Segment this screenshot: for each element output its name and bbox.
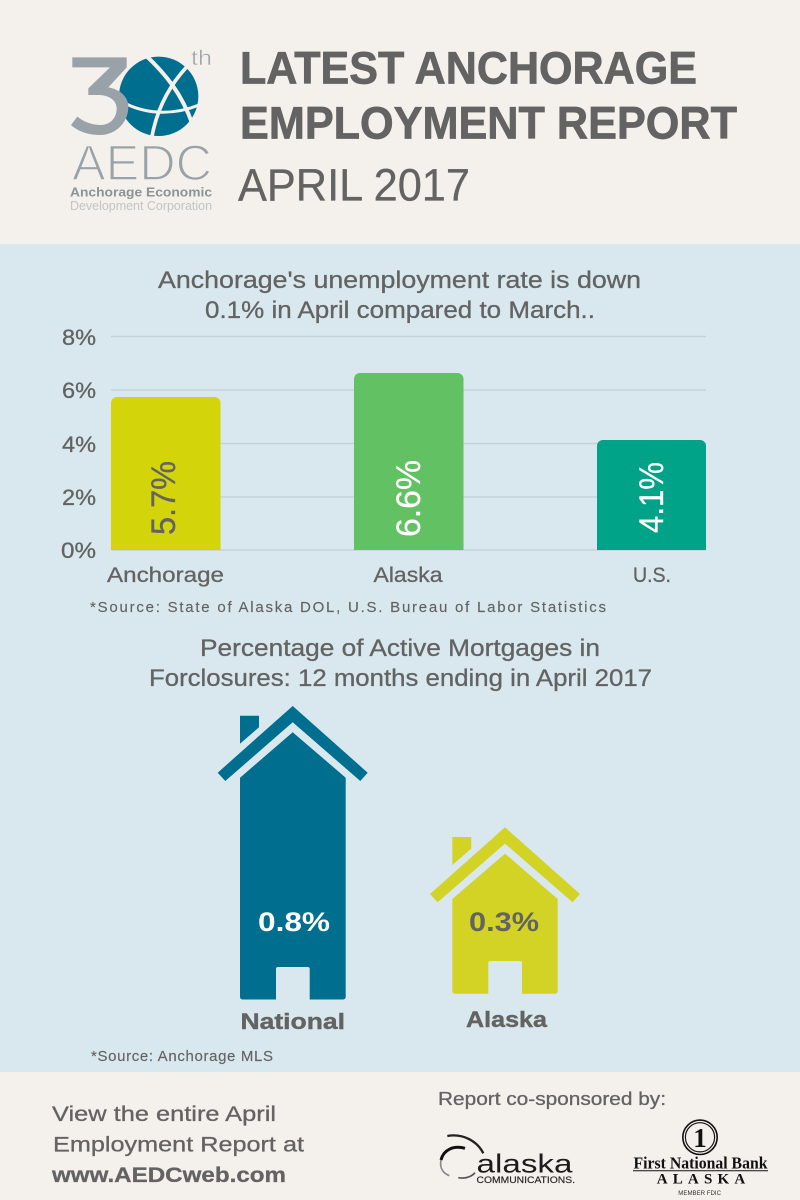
logo: First National Bank Alaska: ALASKA (657, 1172, 745, 1188)
title: LATEST ANCHORAGE (240, 42, 697, 94)
heading: unemployment: 0.1% in April compared to March.. (205, 297, 595, 324)
label: National: National (240, 1009, 345, 1034)
logo: First National Bank Alaska: 1 (693, 1123, 707, 1153)
value: Alaska: 0.3% (469, 907, 539, 937)
heading: mortgages: Forclosures: 12 months ending in April 2017 (149, 665, 652, 692)
bar chart: unemployment rate (61, 325, 706, 587)
heading: unemployment (158, 267, 641, 324)
logo: Alaska Communications: alaska (476, 1148, 573, 1178)
panel: charts background (0, 244, 800, 1072)
footer: view report text: Employment Report at (53, 1132, 304, 1156)
title: APRIL 2017 (238, 160, 470, 210)
logo text: Development Corporation: Development Corporation (70, 198, 212, 213)
axis labels: 4% (62, 432, 96, 457)
logo: First National Bank Alaska: MEMBER FDIC (678, 1190, 721, 1197)
bar: Alaska (354, 373, 464, 550)
category labels: Anchorage (107, 563, 224, 587)
title (238, 42, 737, 210)
category labels (107, 563, 671, 587)
footer: view report text: View the entire April (52, 1102, 276, 1126)
category labels: U.S. (633, 563, 671, 587)
label: Alaska: Alaska (466, 1007, 548, 1032)
logo: First National Bank Alaska: First National Bank (634, 1153, 768, 1172)
logo: Alaska Communications (441, 1135, 575, 1186)
axis labels: 6% (62, 378, 96, 403)
icon: globe (119, 55, 200, 138)
source note: unemployment: *Source: State of Alaska DOL, U.S. Bureau of Labor Statistics (90, 599, 606, 616)
heading: unemployment: Anchorage's unemployment rate is down (158, 267, 641, 294)
logo: First National Bank Alaska (633, 1120, 768, 1197)
footer: sponsors label: Report co-sponsored by: (438, 1088, 666, 1109)
source note: mortgages: *Source: Anchorage MLS (91, 1048, 273, 1065)
logo: AEDC 30th (70, 47, 212, 213)
footer: view report text (51, 1102, 304, 1187)
logo text: th: th (191, 47, 212, 70)
logo text: AEDC: AEDC (72, 135, 212, 191)
footer: view report text: www.AEDCweb.com (51, 1163, 286, 1187)
bar: U.S. (597, 440, 706, 550)
axis labels (61, 325, 96, 563)
icon: national house (218, 706, 368, 1000)
icon: numeral 3 (71, 57, 128, 135)
value: national: 0.8% (258, 907, 330, 937)
axis labels: 0% (61, 538, 96, 563)
value: Anchorage: 5.7% (145, 461, 183, 535)
logo text: Anchorage Economic: Anchorage Economic (70, 184, 212, 200)
category labels: Alaska (374, 563, 443, 587)
bar: Anchorage (111, 397, 220, 550)
axis labels: 8% (62, 325, 96, 350)
logo: Alaska Communications: COMMUNICATIONS. (476, 1175, 575, 1186)
value: U.S.: 4.1% (633, 462, 671, 533)
value: Alaska: 6.6% (390, 460, 428, 537)
icon: Alaska house (430, 827, 580, 994)
heading: mortgages: Percentage of Active Mortgages in (200, 635, 600, 662)
axis labels: 2% (62, 485, 96, 510)
heading: mortgages (149, 635, 652, 692)
title: EMPLOYMENT REPORT (240, 98, 737, 148)
